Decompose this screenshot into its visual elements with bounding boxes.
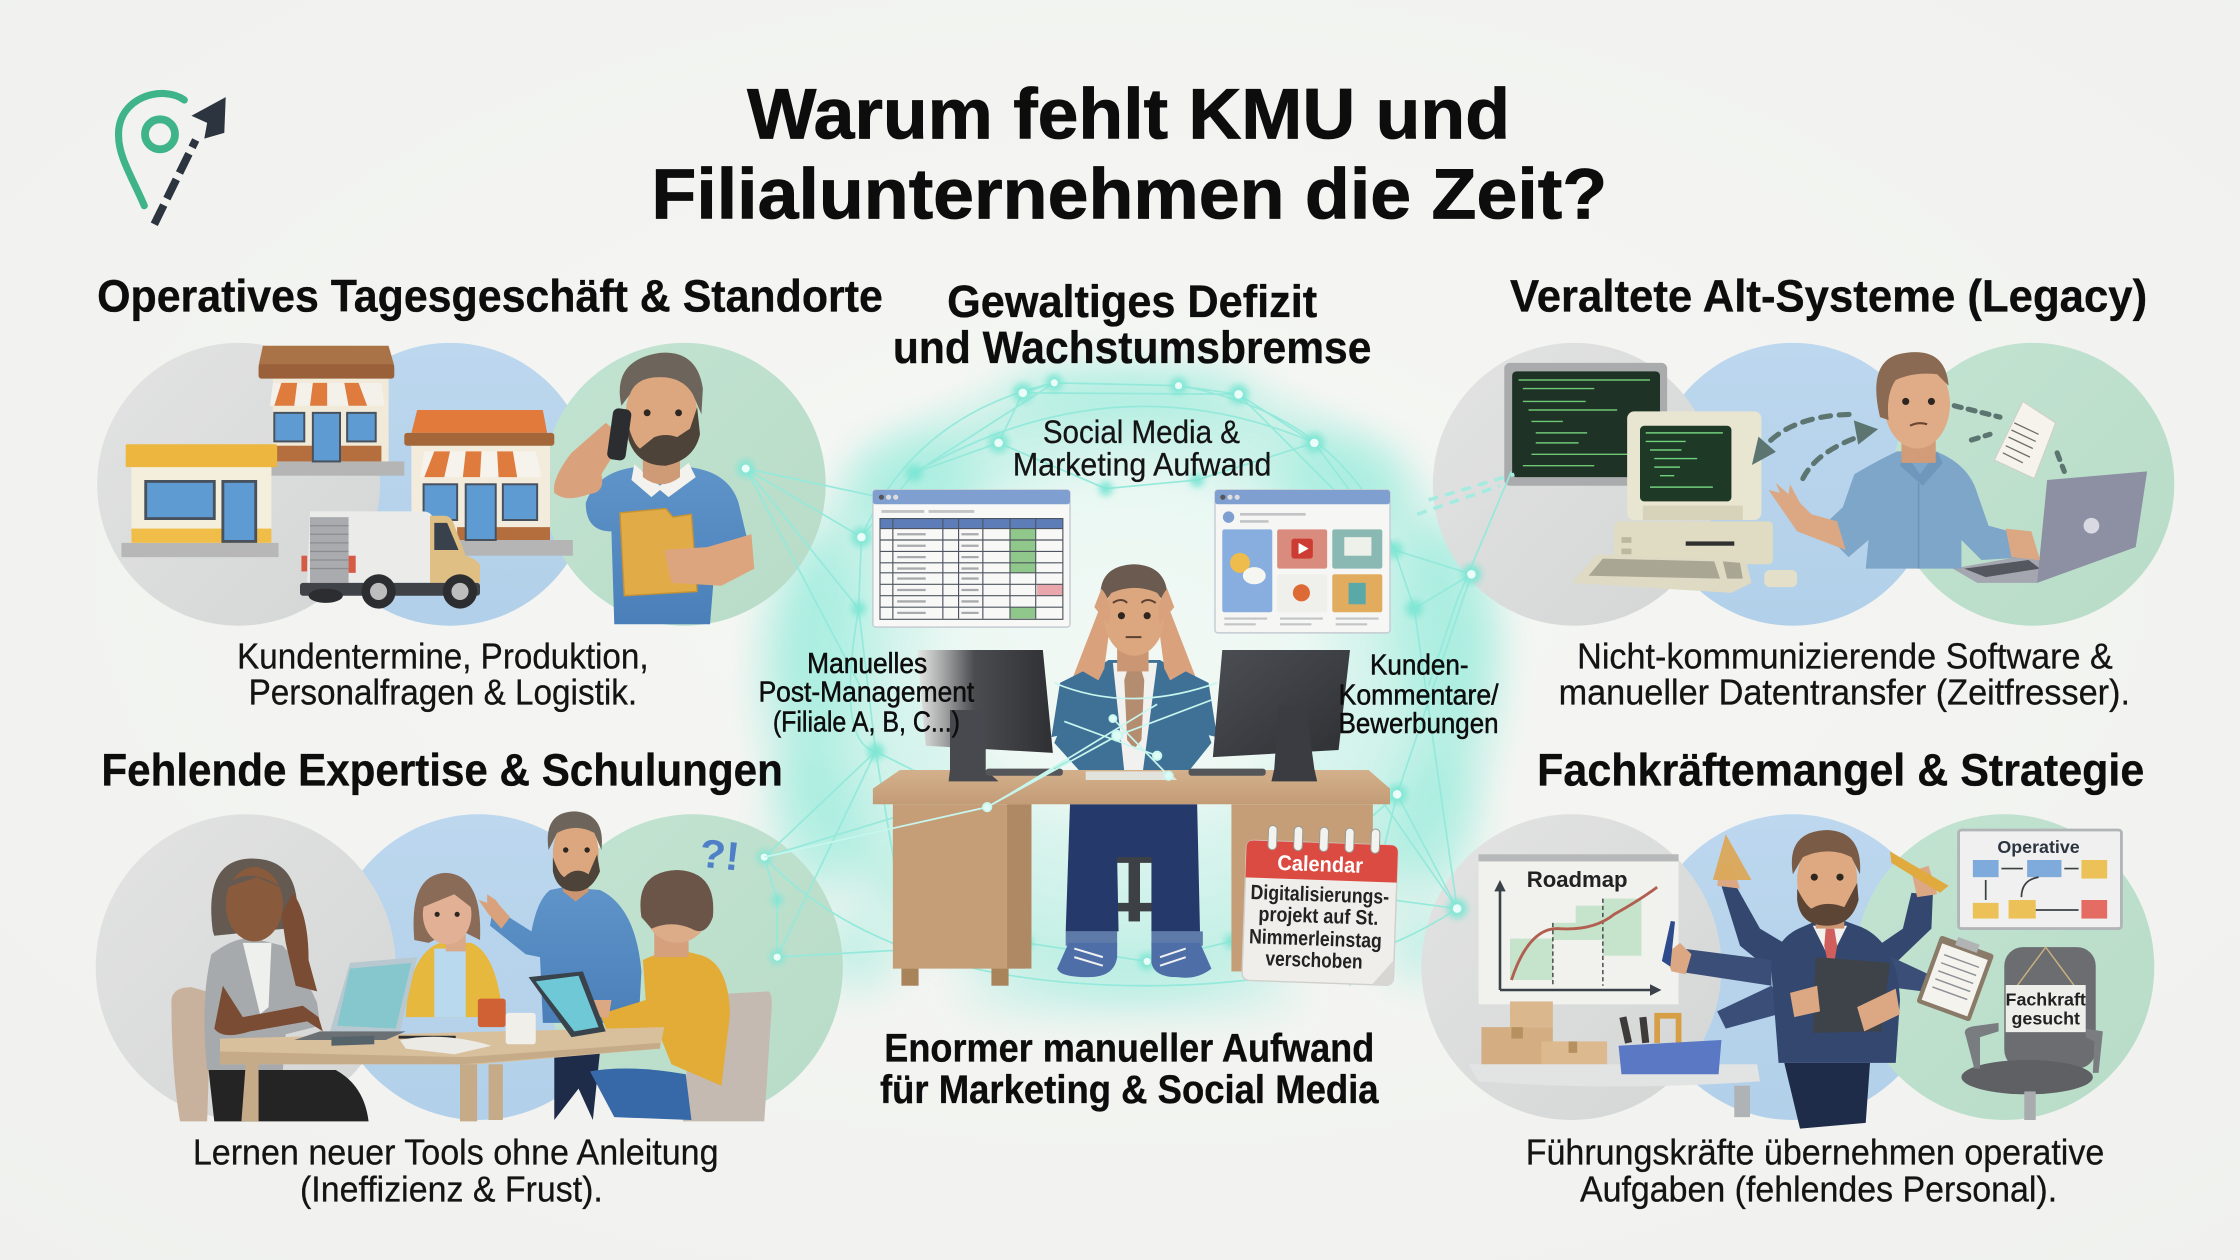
text: Kundentermine: Kundentermine, Produktion, [237, 636, 649, 677]
text: Lernen neuer Tools: (Ineffizienz & Frust). [300, 1168, 603, 1209]
icon: toolbox and table [1469, 1016, 1760, 1117]
panel: veraltete Alt-Systeme [1433, 270, 2174, 712]
panel: fehlende Expertise [96, 745, 843, 1209]
label: Manuelles Post-Management: Manuelles [807, 648, 927, 680]
text: Lernen neuer Tools [193, 1131, 719, 1209]
icon: empty chair with sign: Fachkraft [2006, 990, 2086, 1010]
figure part: head [1094, 564, 1174, 671]
logo: pin and dashed arrow [119, 93, 226, 224]
label: Manuelles Post-Management: Post-Management [759, 676, 974, 708]
icon: shop orange [404, 410, 573, 556]
icon: calendar: Digitalisierungs- [1250, 881, 1390, 909]
icon: operative process board [1959, 830, 2121, 929]
icon: laptop [1953, 471, 2147, 583]
circle backdrop: strategie [1421, 814, 2154, 1120]
text: Führungskräfte: Führungskräfte übernehmen operative [1526, 1131, 2104, 1172]
figure: multitasking manager [1664, 830, 1949, 1129]
icon: calendar: projekt auf St. [1258, 903, 1379, 930]
heading: Fachkräftemangel: Fachkräftemangel & Strategie [1537, 745, 2144, 796]
icon: delivery van [300, 511, 480, 609]
heading: veraltete Alt-Systeme: Veraltete Alt-Systeme (Legacy) [1510, 270, 2147, 321]
figure: man in yellow sweater from behind [560, 870, 772, 1121]
circle backdrop: standorte [97, 343, 826, 626]
icon: empty chair with sign: gesucht [2012, 1008, 2080, 1028]
icon: operative process board: Operative [1997, 837, 2080, 857]
text: Nicht-kommunizierende [1559, 636, 2130, 712]
label: Manuelles Post-Management [759, 648, 974, 738]
icon: calendar: verschoben [1265, 947, 1363, 974]
figure: confused man at computer [1769, 352, 2040, 569]
circle backdrop: legacy [1433, 343, 2174, 626]
icon: shop brown [259, 346, 404, 476]
caption: Enormer manueller Aufwand [880, 1026, 1379, 1112]
figure: stressed man at desk [1051, 564, 1217, 978]
panel: Fachkräftemangel [1421, 745, 2154, 1209]
figure: man standing with beard [479, 811, 641, 1120]
figure: man on phone with folder [554, 353, 754, 624]
icon: calendar: Calendar [1277, 851, 1363, 878]
figure: woman in middle [406, 873, 503, 1017]
icon: clipboard [1916, 931, 1996, 1022]
title [651, 75, 1607, 235]
icon: left monitor [917, 650, 1063, 781]
icon: calendar [1242, 825, 1399, 985]
network lines over figure [764, 683, 1217, 857]
chart: roadmap whiteboard: Roadmap [1527, 867, 1628, 892]
heading: fehlende Expertise: Fehlende Expertise & Schulungen [101, 745, 783, 796]
icon: data transfer dashed arrows [1756, 406, 2064, 479]
heading: Gewaltiges Defizit [893, 276, 1371, 373]
figure part: chair [1086, 671, 1186, 921]
icon: dark terminal monitor [1504, 363, 1667, 486]
text: Kundentermine [237, 636, 649, 712]
figure: woman on left at laptop [171, 859, 369, 1121]
figure part: legs [1057, 804, 1211, 978]
panel: operatives Tagesgeschäft [97, 270, 883, 712]
title: Filialunternehmen die Zeit? [651, 155, 1607, 235]
icon: beige retro computer [1571, 411, 1797, 593]
network connections and nodes [737, 374, 1514, 986]
text: Kundentermine: Personalfragen & Logistik. [249, 671, 637, 712]
window: spreadsheet post-management [873, 490, 1070, 627]
text: Nicht-kommunizierende: manueller Datentransfer (Zeitfresser). [1559, 671, 2130, 712]
text: Führungskräfte: Aufgaben (fehlendes Personal). [1580, 1168, 2057, 1209]
heading: Gewaltiges Defizit: und Wachstumsbremse [893, 322, 1371, 373]
text: Führungskräfte [1526, 1131, 2104, 1209]
label: social media: Marketing Aufwand [1013, 447, 1271, 483]
heading: Gewaltiges Defizit: Gewaltiges Defizit [947, 276, 1317, 327]
icon: empty chair with sign [1961, 947, 2103, 1120]
icon: right monitor [1189, 650, 1350, 781]
label: Kunden-Kommentare: Kommentare/ [1339, 679, 1499, 711]
icon: cardboard boxes [1481, 1001, 1607, 1073]
label: social media [1013, 414, 1271, 483]
text: Lernen neuer Tools: Lernen neuer Tools ohne Anleitung [193, 1131, 719, 1172]
label: Kunden-Kommentare: Bewerbungen [1339, 708, 1499, 740]
icon: paper document [1994, 401, 2056, 479]
label: Kunden-Kommentare [1339, 649, 1499, 740]
circle backdrop: expertise [96, 814, 843, 1120]
label: Kunden-Kommentare: Kunden- [1370, 649, 1469, 681]
window: social media posts [1215, 490, 1390, 633]
network glow [731, 351, 1526, 1014]
title: Warum fehlt KMU und [747, 75, 1510, 155]
panel: Gewaltiges Defizit centre [759, 276, 1499, 1112]
table with laptop, tablet and mugs [220, 957, 664, 1121]
icon: paper and hands on desk [1086, 771, 1177, 780]
chart: roadmap whiteboard [1479, 854, 1679, 1004]
figure part: torso and arms [1051, 607, 1217, 771]
caption: Enormer manueller Aufwand: Enormer manueller Aufwand [884, 1026, 1374, 1070]
icon: calendar: Nimmerleinstag [1249, 925, 1382, 953]
icon: question and exclamation marks: ?! [697, 832, 742, 880]
icon: shop yellow [121, 444, 279, 557]
caption: Enormer manueller Aufwand: für Marketing & Social Media [880, 1068, 1379, 1112]
label: social media: Social Media & [1043, 414, 1240, 450]
icon: desk [873, 770, 1390, 986]
label: Manuelles Post-Management: (Filiale A, B, C...) [773, 706, 960, 738]
text: Nicht-kommunizierende: Nicht-kommunizierende Software & [1577, 636, 2113, 677]
heading: operatives Tagesgeschäft: Operatives Tagesgeschäft & Standorte [97, 270, 883, 321]
